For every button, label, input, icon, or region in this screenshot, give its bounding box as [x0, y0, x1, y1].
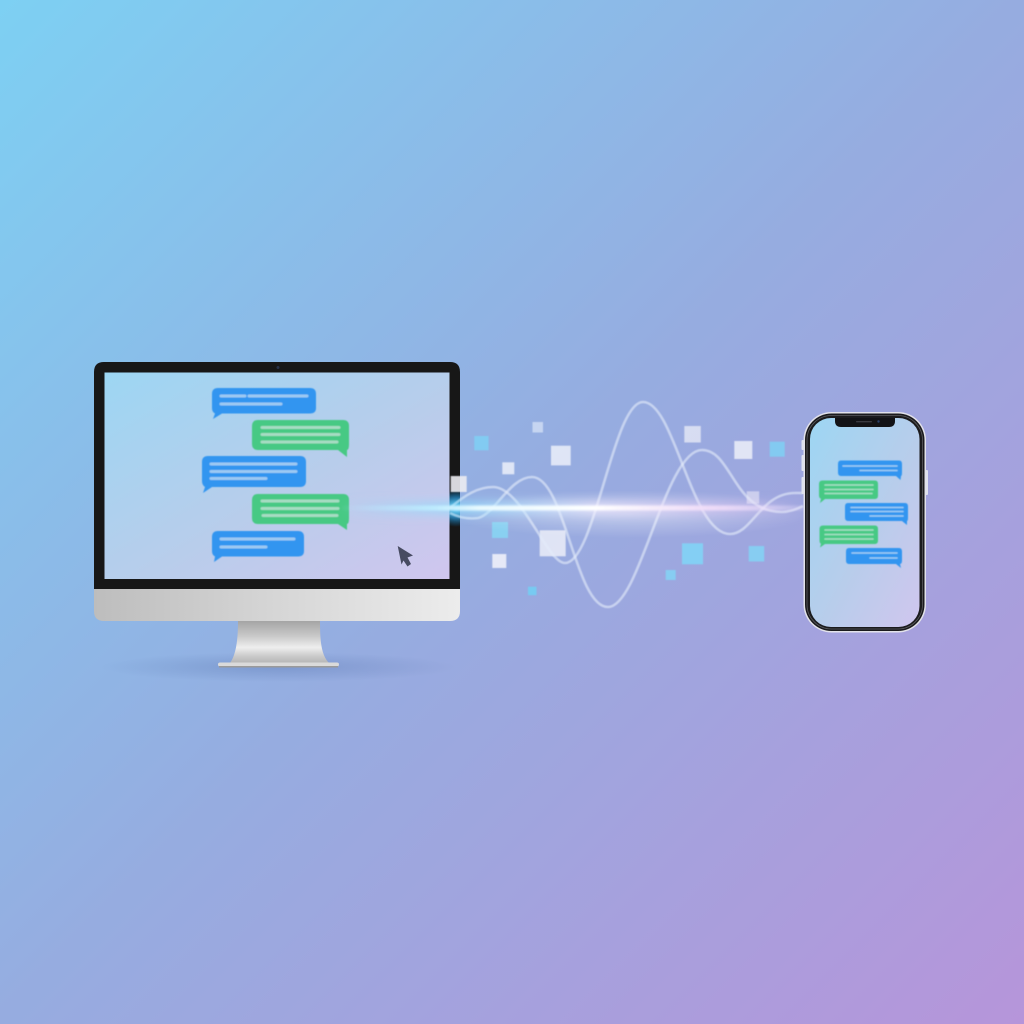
chat bubble 3 — [202, 456, 306, 493]
phone bubble 1 — [838, 460, 902, 480]
phone metal stripe — [807, 416, 922, 629]
wave line B — [450, 402, 803, 563]
webcam — [276, 366, 280, 369]
phone bubble 4 — [820, 526, 878, 548]
phone frame — [804, 412, 926, 632]
monitor stand — [218, 621, 339, 668]
phone black band — [805, 414, 924, 631]
phone bubble 5 — [846, 548, 902, 568]
beam core — [340, 506, 804, 510]
phone bubble 2 — [819, 480, 878, 503]
chat bubble 4 — [252, 494, 349, 530]
monitor screen — [104, 372, 450, 579]
smartphone — [802, 412, 928, 632]
beam soft halo — [445, 490, 815, 538]
chat bubble 5 — [212, 531, 304, 562]
phone bubble 3 — [845, 503, 908, 525]
chat bubble 1 — [212, 388, 316, 419]
desktop monitor — [94, 362, 460, 682]
notch — [835, 418, 895, 427]
phone screen — [810, 418, 920, 627]
light beam with waves — [340, 402, 815, 607]
monitor black bezel — [94, 362, 460, 589]
bezel flare — [450, 490, 460, 526]
wave line A — [450, 450, 803, 607]
monitor silver chin — [94, 586, 460, 621]
monitor shadow — [100, 652, 456, 682]
cursor arrow — [398, 546, 413, 566]
floating data squares — [451, 422, 785, 595]
beam outer glow — [340, 502, 804, 514]
side buttons — [802, 440, 928, 495]
chat bubble 2 — [252, 420, 349, 457]
